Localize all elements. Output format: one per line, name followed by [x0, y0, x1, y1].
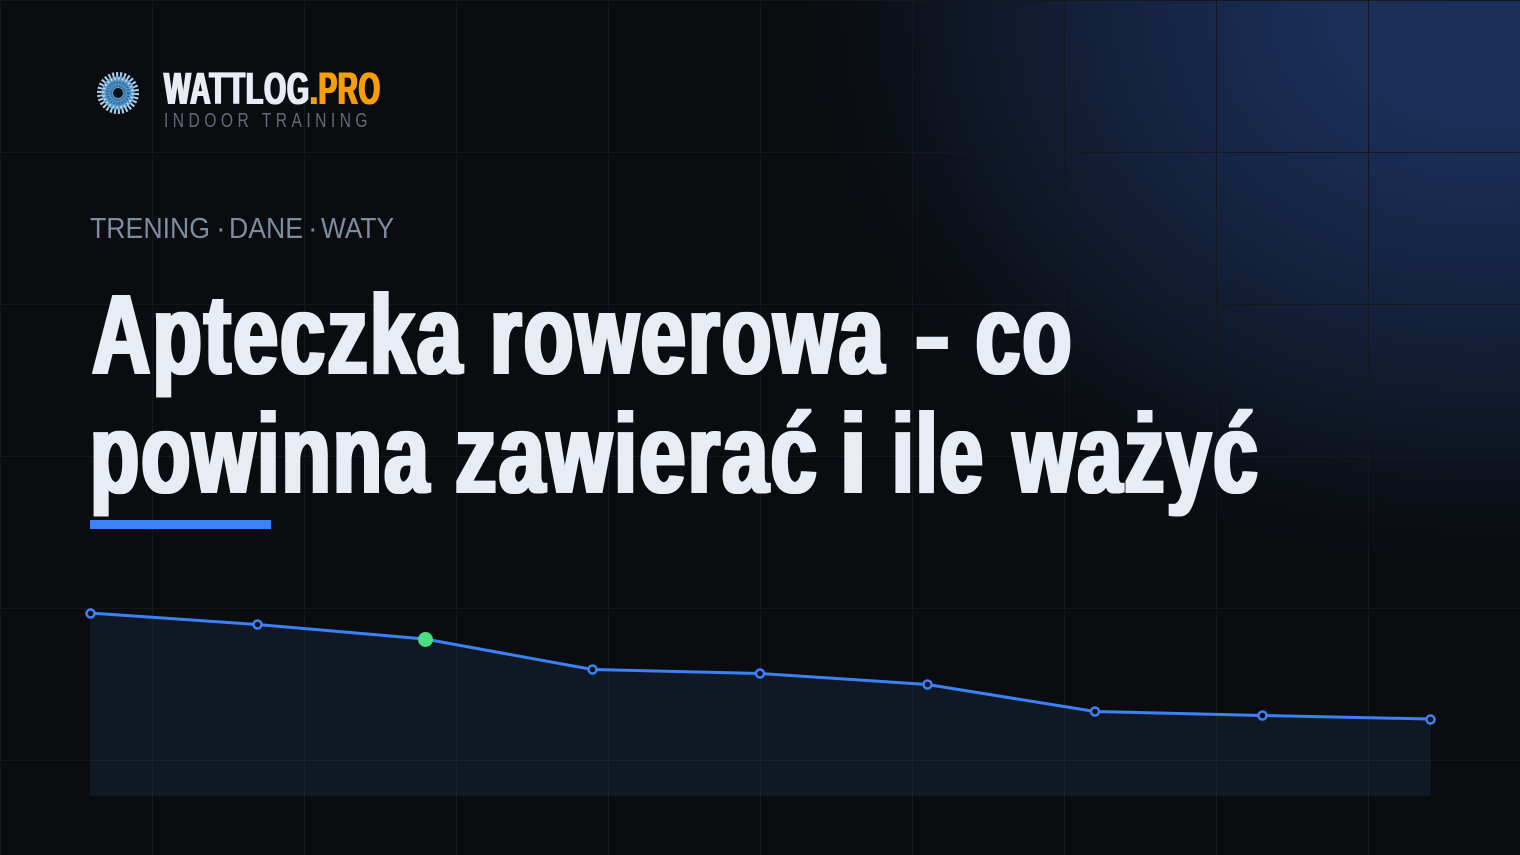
line chart [86, 610, 1434, 796]
eyebrow: TRENING [90, 213, 210, 245]
eyebrow: · [216, 213, 226, 245]
title underline [90, 520, 271, 529]
title line 1: rowerowa [490, 272, 886, 398]
title line 2: i [840, 391, 870, 517]
eyebrow [90, 213, 394, 245]
title line 1: – [917, 272, 949, 398]
chart line [90, 613, 1430, 719]
title line 1: Apteczka [92, 272, 464, 398]
tagline: INDOOR TRAINING [164, 109, 368, 131]
icon: cassette sprocket [100, 74, 136, 112]
brand name: WATTLOG [164, 63, 310, 114]
title line 2 [90, 391, 1260, 517]
eyebrow: · [308, 213, 318, 245]
title line 2: ważyć [1012, 391, 1260, 517]
title [90, 272, 1260, 517]
title line 2: ile [892, 391, 985, 517]
brand suffix: .PRO [310, 63, 381, 114]
eyebrow: WATY [321, 213, 394, 245]
title line 1 [92, 272, 1074, 398]
chart area [90, 613, 1431, 796]
title line 2: powinna [90, 391, 431, 517]
title line 1: co [976, 272, 1074, 398]
title line 2: zawierać [455, 391, 819, 517]
highlighted point [418, 632, 433, 647]
logo [100, 63, 381, 131]
chart points [86, 610, 1434, 724]
eyebrow: DANE [229, 213, 303, 245]
